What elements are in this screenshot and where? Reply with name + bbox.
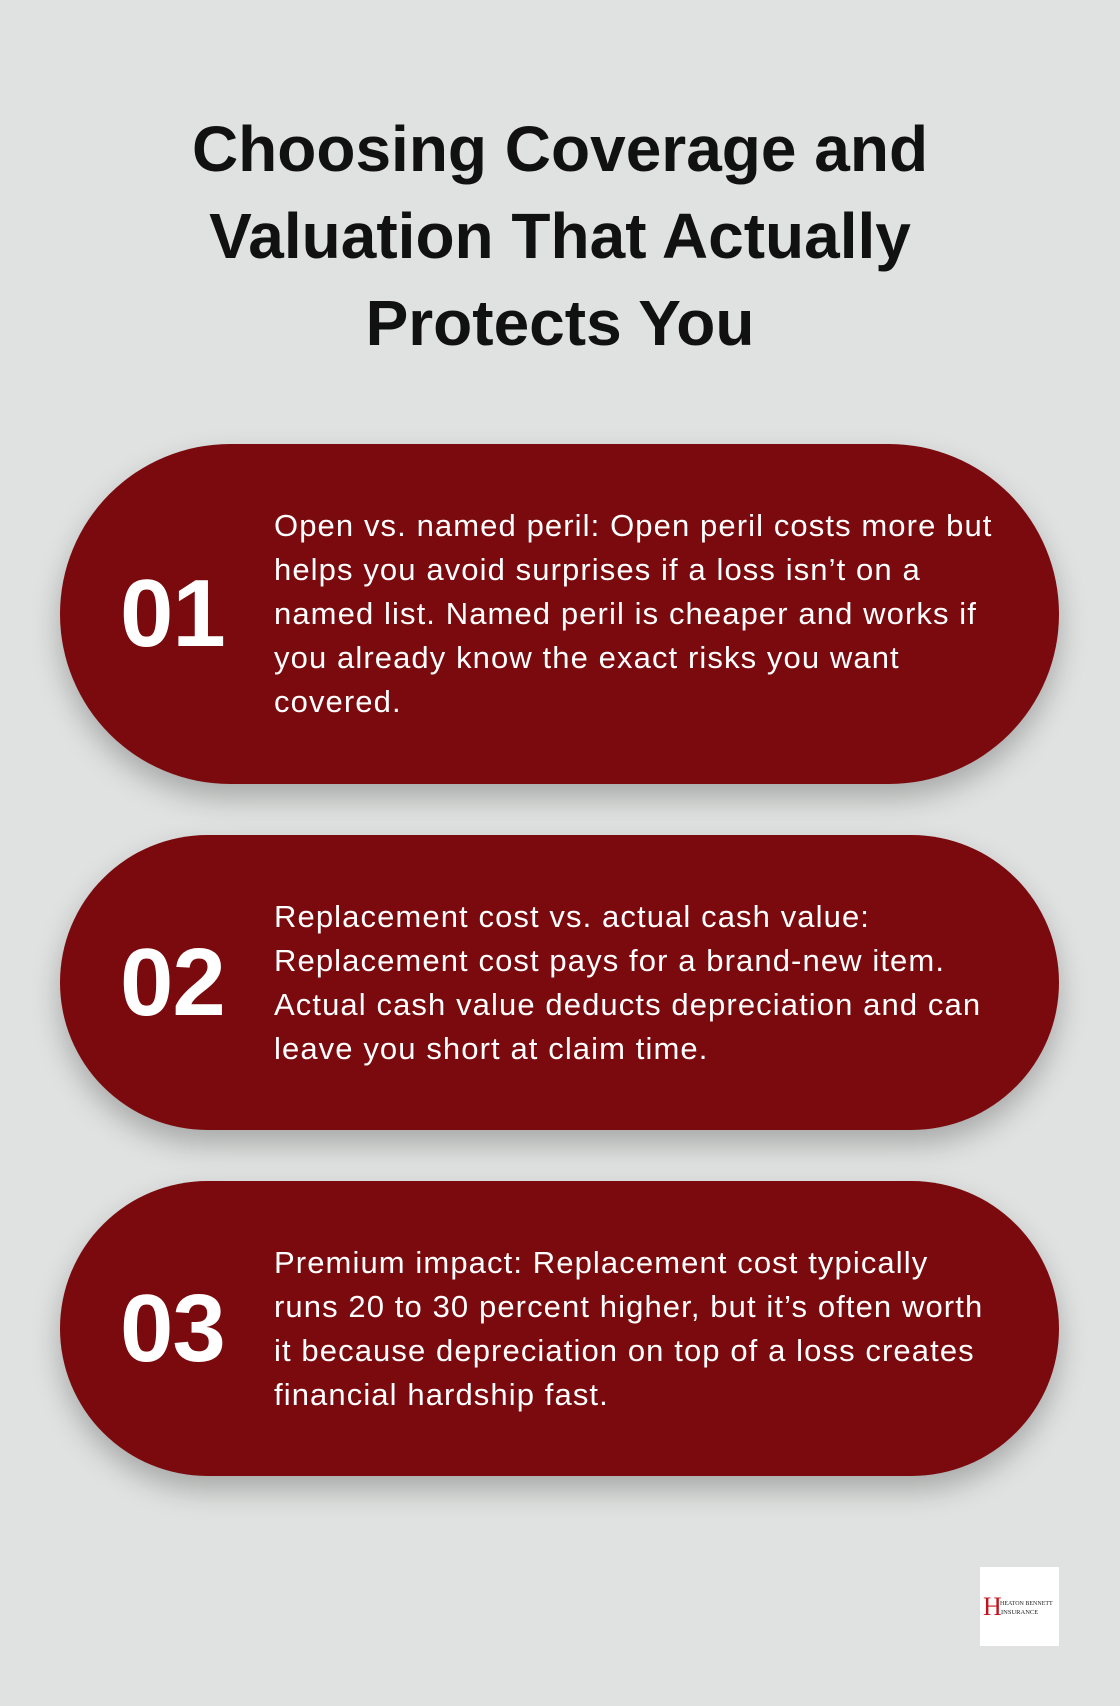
logo — [980, 1567, 1059, 1646]
panel: card 2 — [60, 835, 1059, 1130]
text: open vs named peril — [274, 508, 993, 719]
title: Protects You — [366, 287, 754, 359]
title: Choosing Coverage and — [192, 113, 928, 185]
text: replacement cost vs ACV: Replacement cost vs. actual cash value: — [274, 898, 870, 934]
text: premium impact: financial hardship fast. — [274, 1376, 609, 1412]
text: premium impact: runs 20 to 30 percent higher, but it’s often worth — [274, 1288, 983, 1324]
text: open vs named peril: helps you avoid surprises if a loss isn’t on a — [274, 552, 921, 587]
text: open vs named peril: covered. — [274, 684, 402, 719]
logo mark: H — [983, 1592, 1002, 1621]
text: open vs named peril: you already know the exact risks you want — [274, 640, 900, 675]
number 02: 02 — [120, 928, 225, 1036]
panel: card 1 — [60, 444, 1059, 784]
logo mark: INSURANCE — [1001, 1609, 1038, 1616]
text: replacement cost vs ACV: Actual cash value deducts depreciation and can — [274, 986, 981, 1022]
text: replacement cost vs ACV: Replacement cost pays for a brand-new item. — [274, 942, 945, 978]
text: premium impact: Premium impact: Replacement cost typically — [274, 1244, 928, 1280]
panel: card 3 — [60, 1181, 1059, 1476]
text: open vs named peril: named list. Named peril is cheaper and works if — [274, 596, 977, 631]
text: premium impact: it because depreciation on top of a loss creates — [274, 1332, 975, 1368]
logo mark — [983, 1592, 1053, 1621]
number 03: 03 — [120, 1274, 225, 1382]
text: replacement cost vs ACV: leave you short at claim time. — [274, 1030, 708, 1066]
logo mark: HEATON BENNETT — [1000, 1601, 1053, 1607]
text: replacement cost vs ACV — [274, 898, 981, 1066]
title: Valuation That Actually — [209, 200, 911, 272]
title — [192, 113, 928, 359]
text: premium impact — [274, 1244, 983, 1412]
number 01: 01 — [120, 560, 225, 667]
text: open vs named peril: Open vs. named peril: Open peril costs more but — [274, 508, 993, 543]
